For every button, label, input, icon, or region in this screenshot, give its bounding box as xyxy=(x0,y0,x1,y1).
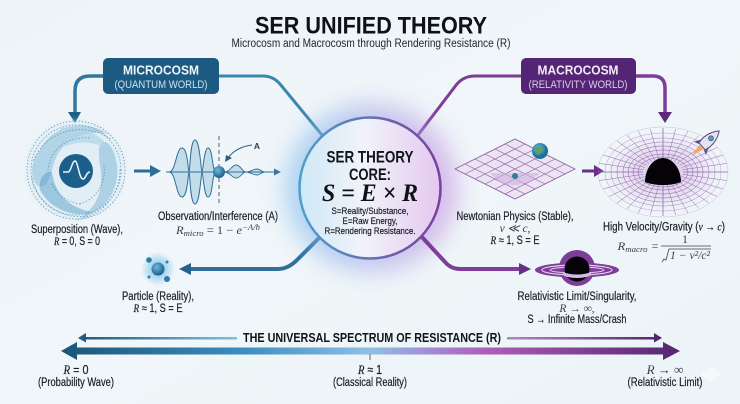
text: spectrum R→∞: R → ∞ xyxy=(646,362,683,377)
text: observation label and formula: e xyxy=(236,225,242,237)
text: newtonian label: v ≪ c, xyxy=(500,223,531,235)
text: superposition label: R = 0, S = 0 xyxy=(53,236,100,248)
icon: black hole singularity xyxy=(535,250,619,286)
text: core equation: S = E × R xyxy=(322,180,418,207)
text: newtonian label: Newtonian Physics (Stable), xyxy=(456,211,574,223)
text: spectrum R→∞ xyxy=(628,362,703,389)
heading: spectrum title: THE UNIVERSAL SPECTRUM OF RESISTANCE (R) xyxy=(243,330,501,345)
icon: superposition wave swirl xyxy=(26,120,126,220)
icon: particle xyxy=(141,252,175,286)
text: superposition label: Superposition (Wave), xyxy=(31,224,123,236)
icon: observation wave packet xyxy=(166,136,281,206)
connector: microcosm to core xyxy=(218,76,322,135)
chart: universal spectrum bar xyxy=(61,342,680,360)
connector: core to singularity xyxy=(421,236,531,275)
text: spectrum R=0: R = 0 xyxy=(63,362,88,377)
text: spectrum R=0 xyxy=(38,362,114,389)
text: high velocity label and formula xyxy=(603,222,725,262)
icon: rocket xyxy=(686,124,725,162)
text: singularity label: R → ∞, xyxy=(558,303,595,315)
text: singularity label: Relativistic Limit/Singularity, xyxy=(518,291,636,303)
arrow: spectrum title right xyxy=(507,333,662,342)
text: particle label: Particle (Reality), xyxy=(122,291,194,303)
text: high velocity label and formula: macro xyxy=(625,245,648,254)
text: high velocity label and formula: = xyxy=(652,241,658,253)
panel: macrocosm label: (RELATIVITY WORLD) xyxy=(528,79,628,91)
text: newtonian label: R ≈ 1, S = E xyxy=(490,235,540,247)
text: high velocity label and formula: 1 xyxy=(682,234,688,246)
arrow: newtonian to high velocity xyxy=(582,165,604,177)
text: high velocity label and formula: High Velocity/Gravity (v → c) xyxy=(603,222,725,234)
text: core heading: SER THEORY xyxy=(326,148,414,166)
core glow xyxy=(285,104,457,272)
icon: newtonian grid with earth xyxy=(455,139,575,199)
text: singularity label: S → Infinite Mass/Crash xyxy=(528,314,626,326)
text: observation label and formula: −A/ħ xyxy=(242,223,260,232)
panel: SER theory core xyxy=(300,118,440,258)
text: observation label and formula: micro xyxy=(184,229,204,238)
text: high velocity label and formula: 1 − v²/c² xyxy=(670,250,711,262)
icon: warped spacetime funnel xyxy=(598,127,728,217)
subtitle: Microcosm and Macrocosm through Rendering Resistance (R) xyxy=(232,38,511,50)
text: newtonian label xyxy=(456,211,574,247)
text: core definitions xyxy=(324,206,416,237)
text: spectrum R=0: (Probability Wave) xyxy=(38,377,114,389)
panel: macrocosm label: MACROCOSM xyxy=(538,64,618,78)
text: spectrum R≈1: (Classical Reality) xyxy=(333,377,407,389)
arrow: superposition to observation xyxy=(134,165,161,177)
text: particle label xyxy=(122,291,194,315)
text: core heading: CORE: xyxy=(349,166,391,184)
text: spectrum R≈1 xyxy=(333,362,407,389)
arrow: spectrum title left xyxy=(78,333,237,342)
connector: macrocosm to high velocity xyxy=(636,76,672,123)
title: SER UNIFIED THEORY xyxy=(255,12,487,40)
panel: microcosm label xyxy=(103,58,219,94)
text: observation label and formula: = 1 − xyxy=(204,225,236,237)
text: core definitions: E=Raw Energy, xyxy=(342,216,398,227)
text: spectrum R→∞: (Relativistic Limit) xyxy=(628,377,703,389)
text: spectrum R≈1: R ≈ 1 xyxy=(357,362,382,377)
text: superposition label xyxy=(31,224,123,248)
text: core definitions: R=Rendering Resistance. xyxy=(324,226,416,237)
text: observation label and formula xyxy=(158,211,278,238)
text: singularity label xyxy=(518,291,636,326)
panel: macrocosm label xyxy=(521,58,636,94)
connector: microcosm to superposition xyxy=(68,76,104,123)
text: high velocity label and formula: R xyxy=(618,241,625,253)
text: core heading xyxy=(326,148,414,184)
panel: microcosm label: MICROCOSM xyxy=(123,64,199,78)
icon: observation wave packet: A xyxy=(254,141,260,151)
panel: microcosm label: (QUANTUM WORLD) xyxy=(114,79,208,91)
connector: core to particle xyxy=(179,238,319,275)
connector: macrocosm to newtonian core xyxy=(418,76,521,135)
text: observation label and formula: Observation/Interference (A) xyxy=(158,211,278,223)
sparkle mark xyxy=(700,366,722,383)
text: core definitions: S=Reality/Substance, xyxy=(332,206,408,217)
text: observation label and formula: R xyxy=(176,225,183,237)
text: particle label: R ≈ 1, S = E xyxy=(133,303,183,315)
